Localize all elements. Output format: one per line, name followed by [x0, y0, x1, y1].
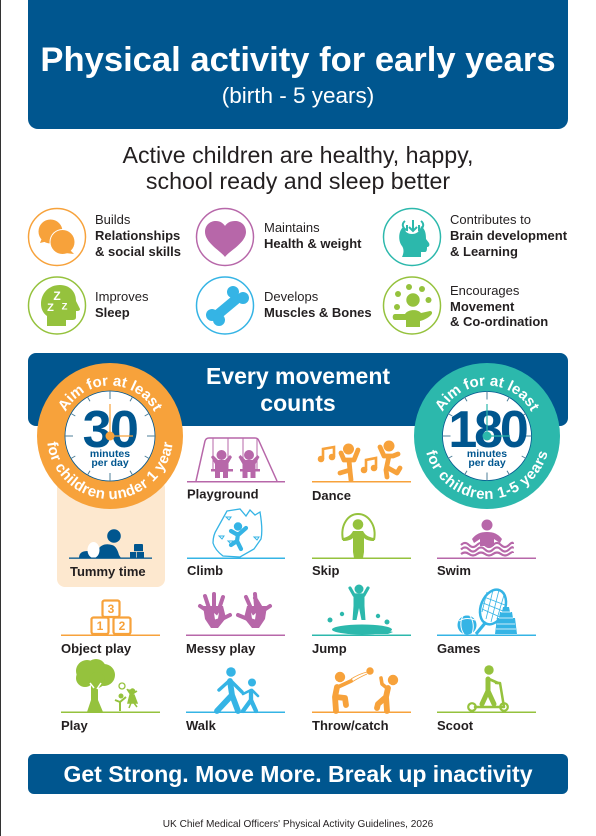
- activity: throw and catch: Throw/catch: [312, 718, 389, 733]
- activity: playground: Playground: [187, 486, 259, 502]
- source note: UK Chief Medical Officers' Physical Activity Guidelines, 2026: [163, 819, 434, 830]
- benefit: sleep: Sleep: [95, 305, 130, 320]
- call to action banner: [28, 754, 568, 794]
- icon: head with arrows: [399, 220, 429, 257]
- large number: 180: [448, 401, 527, 459]
- benefit: muscles and bones: Develops: [264, 289, 319, 304]
- activity: climb: [187, 509, 285, 578]
- icon: sleeping head: Z: [62, 302, 68, 312]
- icon: sleeping head: [41, 285, 80, 326]
- benefit: muscles and bones: [196, 277, 372, 334]
- activity: walk: Walk: [186, 718, 217, 733]
- title: Physical activity for early years: [40, 41, 556, 79]
- activity: messy play: [186, 594, 285, 656]
- benefit: relationships: Builds: [95, 212, 131, 227]
- benefit: brain development: [384, 208, 568, 266]
- activity: jump: [312, 584, 411, 656]
- activity: climb: Climb: [187, 563, 223, 578]
- activity: dance: [312, 440, 411, 503]
- icon: speech bubbles: [38, 220, 76, 255]
- subtitle: (birth - 5 years): [222, 83, 374, 108]
- clock badge: 180 minutes: minutes: [467, 448, 507, 460]
- activity: dance: Dance: [312, 488, 351, 503]
- benefit: relationships: [28, 208, 181, 266]
- activity: scoot: [437, 665, 536, 733]
- activity: skip: Skip: [312, 563, 340, 578]
- activity: scoot: Scoot: [437, 718, 474, 733]
- benefit: movement and co-ordination: Movement: [450, 299, 515, 314]
- activity: swim: Swim: [437, 563, 471, 578]
- tummy time panel: [57, 480, 165, 587]
- movement banner: [28, 353, 568, 426]
- activity: throw and catch: [312, 667, 411, 733]
- ring text: for children 1-5 years: [426, 450, 548, 500]
- ring text: Aim for at least: [59, 378, 162, 412]
- benefit: health and weight: Maintains: [264, 220, 320, 235]
- ring text: Aim for at least: [436, 378, 539, 412]
- clock badge: 30 minutes: per day: [91, 457, 129, 469]
- icon: sleeping head: Z: [47, 302, 54, 314]
- ring text: [426, 378, 548, 500]
- header banner: [28, 0, 568, 129]
- tagline: school ready and sleep better: [146, 168, 450, 194]
- benefit: movement and co-ordination: [384, 277, 548, 334]
- call to action banner: Get Strong. Move More. Break up inactivity: [63, 761, 533, 787]
- activity: object play: [61, 600, 160, 656]
- clock badge: 30 minutes: minutes: [90, 448, 130, 460]
- benefit: health and weight: [196, 208, 362, 266]
- benefit: health and weight: Health & weight: [264, 236, 362, 251]
- activity: walk: [186, 667, 285, 733]
- benefit: brain development: & Learning: [450, 244, 518, 259]
- benefit: brain development: Brain development: [450, 228, 568, 243]
- activity: play: Play: [61, 718, 89, 733]
- benefit: relationships: & social skills: [95, 244, 181, 259]
- activity: object play: 1: [97, 619, 104, 633]
- ring text: [47, 378, 172, 500]
- large number: 30: [83, 401, 137, 459]
- clock badge: 30 minutes: [37, 363, 183, 509]
- activity: object play: 3: [108, 602, 115, 616]
- activity: playground: [187, 438, 285, 502]
- activity: games: Games: [437, 641, 480, 656]
- icon: juggling person: [393, 284, 432, 327]
- activity: play: [61, 659, 160, 733]
- activity: games: [437, 586, 536, 656]
- icon: heart: [205, 221, 246, 257]
- activity: object play: Object play: [61, 641, 132, 656]
- movement banner: Every movement: [206, 363, 390, 389]
- benefit: relationships: Relationships: [95, 228, 180, 243]
- benefit: movement and co-ordination: & Co-ordination: [450, 314, 548, 329]
- movement banner: counts: [260, 390, 336, 416]
- clock badge: 180 minutes: per day: [468, 457, 506, 469]
- benefit: sleep: Improves: [95, 289, 149, 304]
- activity: jump: Jump: [312, 641, 347, 656]
- icon: bone: [206, 286, 249, 326]
- tagline: Active children are healthy, happy,: [122, 142, 474, 168]
- benefit: sleep: [28, 277, 149, 334]
- tummy time panel: Tummy time: [70, 564, 146, 579]
- benefit: movement and co-ordination: Encourages: [450, 283, 520, 298]
- benefit: muscles and bones: Muscles & Bones: [264, 305, 372, 320]
- activity: messy play: Messy play: [186, 641, 256, 656]
- icon: baby on tummy: [69, 529, 152, 559]
- ring text: for children under 1 year: [47, 442, 172, 500]
- activity: object play: 2: [119, 619, 126, 633]
- icon: sleeping head: Z: [53, 289, 61, 303]
- activity: skip: [312, 514, 411, 578]
- clock badge: 180 minutes: [414, 363, 560, 509]
- tagline: [122, 142, 474, 194]
- activity: swim: [437, 520, 536, 578]
- benefit: brain development: Contributes to: [450, 212, 531, 227]
